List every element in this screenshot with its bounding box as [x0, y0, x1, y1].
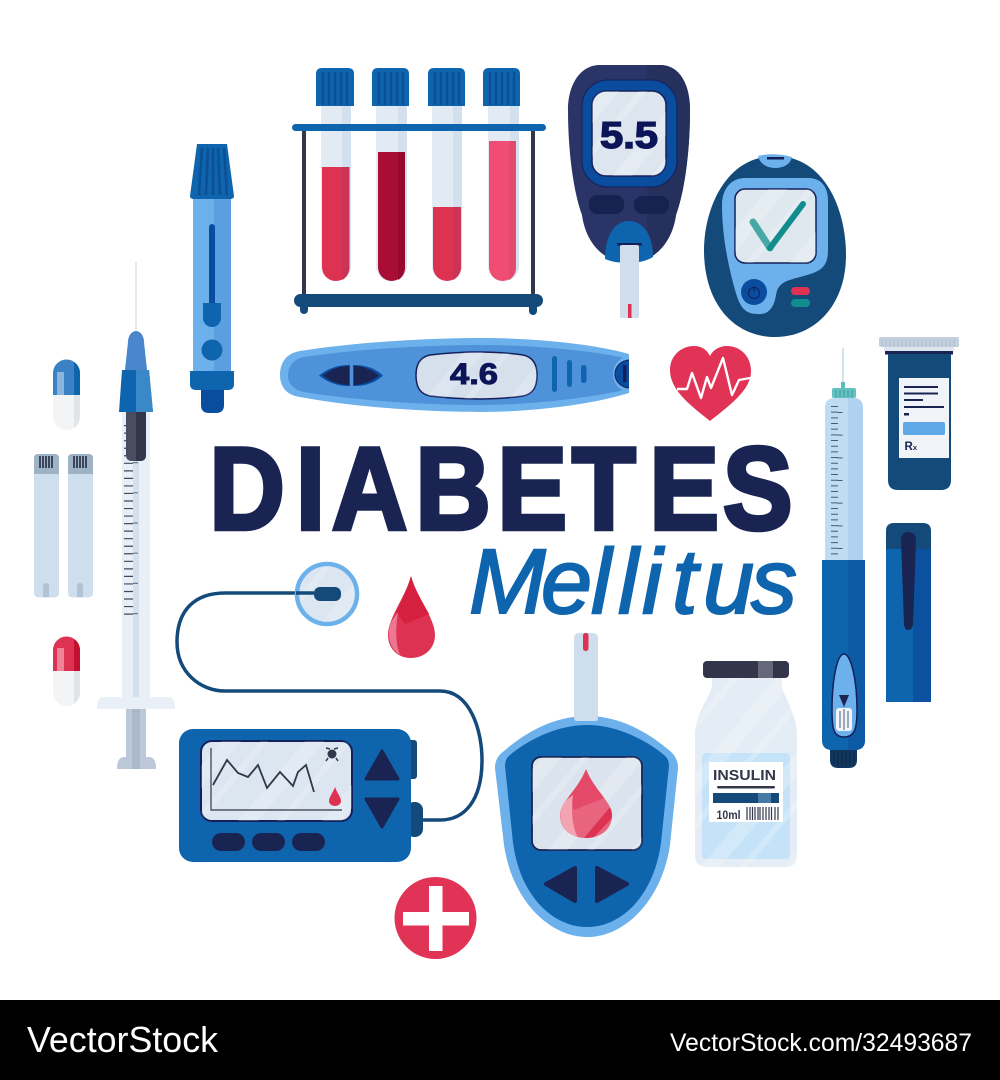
screen: 5.5 reading: 5.5 — [600, 115, 658, 156]
insulin pump with sensor — [177, 564, 482, 862]
vial label: INSULIN — [713, 767, 776, 784]
title: DIABETES: DIABETES — [210, 424, 792, 554]
insulin pen cap — [886, 523, 931, 702]
tubing — [177, 593, 482, 820]
test tube: red blood — [316, 68, 354, 281]
screen: blood drop — [532, 757, 642, 850]
insulin vial — [695, 661, 797, 867]
prescription bottle — [879, 337, 959, 490]
pump screen with glucose chart — [201, 741, 352, 821]
bottom watermark bar — [0, 1000, 1000, 1080]
vial label: 10ml — [716, 810, 740, 822]
test tube: low blood — [428, 68, 465, 281]
test tube: pink blood — [483, 68, 520, 281]
lancing pen: upper left — [190, 144, 234, 413]
insulin pen — [822, 348, 865, 768]
screen: check mark — [735, 189, 816, 263]
glucose meter with check mark — [704, 154, 846, 337]
capsule: blue — [53, 360, 80, 430]
test tube rack — [292, 68, 546, 315]
screen: 4.6 reading — [416, 352, 537, 399]
icon: blood drop — [388, 576, 435, 658]
syringe — [97, 262, 175, 769]
screen: 5.5 reading — [592, 91, 666, 176]
glucometer with blood drop — [495, 633, 678, 937]
image url: VectorStock.com/32493687 — [670, 1029, 972, 1057]
capsule: red — [53, 636, 80, 706]
brand name: VectorStock — [27, 1019, 219, 1060]
test strip: left — [34, 454, 59, 598]
glucose sensor — [296, 564, 357, 624]
power button — [741, 279, 767, 305]
prescription label: Rx — [904, 441, 918, 453]
prescription label — [899, 378, 949, 458]
glucose meter 5.5 — [568, 65, 690, 318]
icon: medical cross — [394, 877, 476, 959]
screen: 4.6 reading: 4.6 — [450, 358, 498, 391]
vial label — [709, 762, 783, 822]
subtitle: Mellitus: Mellitus — [469, 531, 797, 633]
test tube: dark blood — [372, 68, 409, 281]
test strip: right — [68, 454, 93, 598]
lancing device 4.6 — [280, 338, 647, 412]
icon: heart with pulse — [670, 346, 751, 421]
